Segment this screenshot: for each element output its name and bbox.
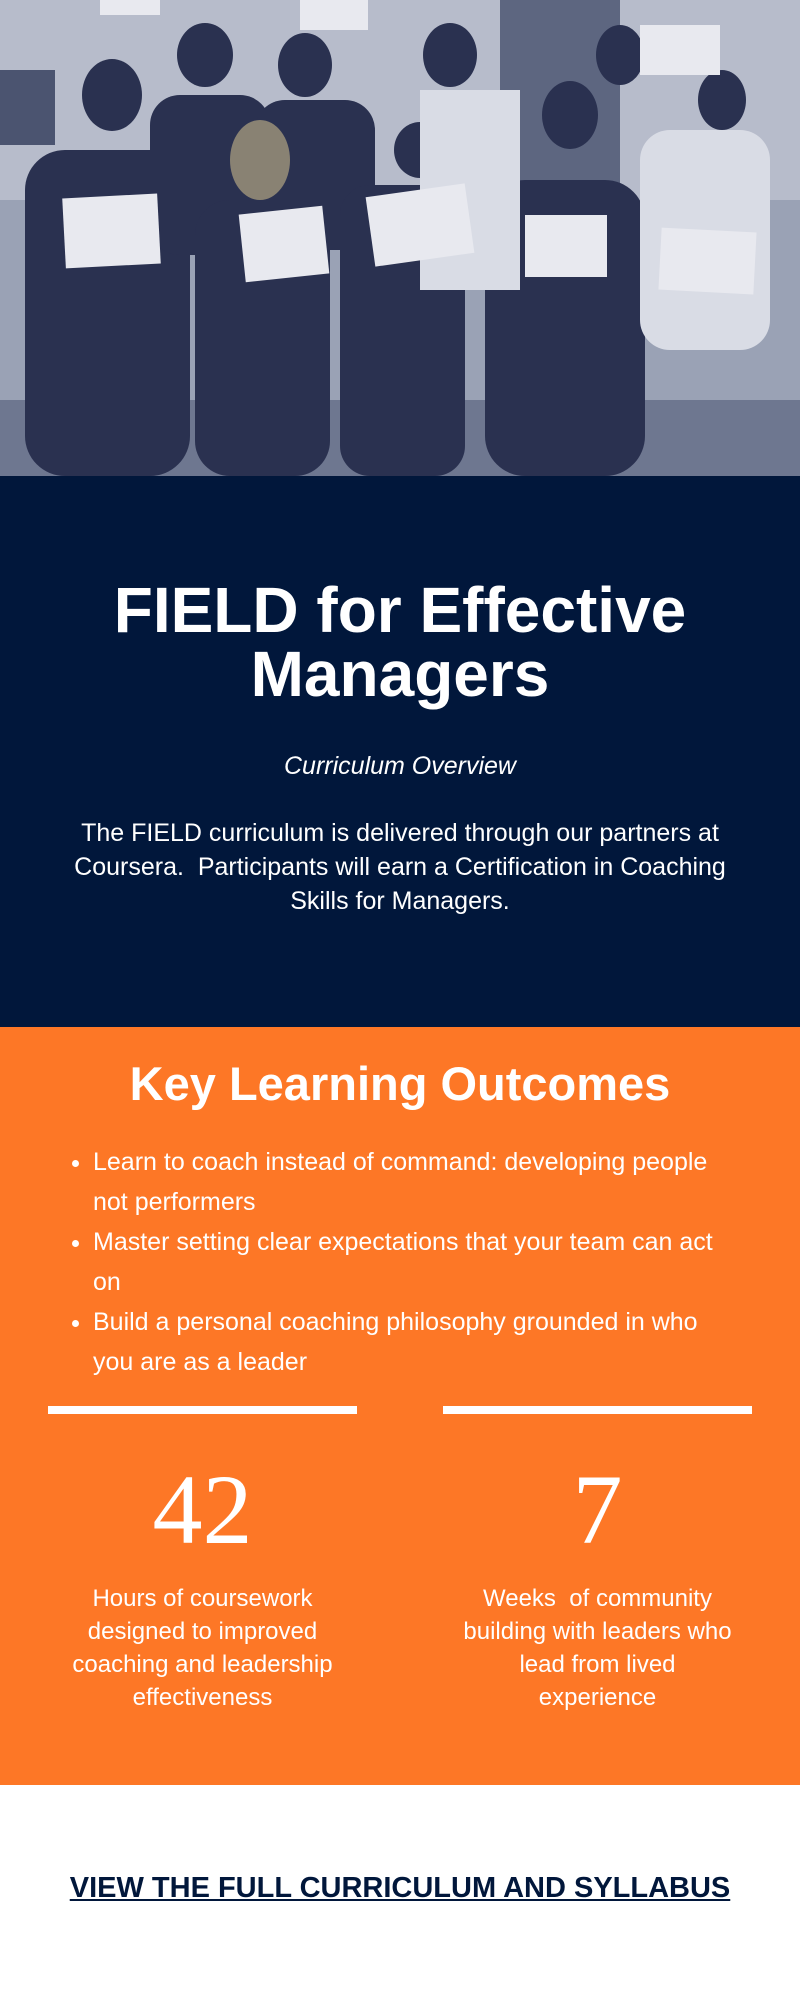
- panel: intro: [0, 476, 800, 1027]
- heading: Key Learning Outcomes: [130, 1057, 670, 1110]
- bullet list: not performers: [93, 1188, 256, 1216]
- stat: 42 hours: [48, 1406, 357, 1711]
- stat: 42 hours: coaching and leadership: [72, 1651, 333, 1678]
- panel: key learning outcomes: [0, 1027, 800, 1785]
- bullet list: Build a personal coaching philosophy grounded in who: [93, 1308, 698, 1336]
- description: The FIELD curriculum is delivered through our partners at Coursera. Participants will earn a Certification in Coaching Skills for Managers.: [74, 819, 726, 915]
- stat: 42 hours: Hours of coursework: [92, 1585, 313, 1612]
- stat: 42 hours: effectiveness: [133, 1684, 272, 1711]
- photo: group with certificates: [0, 0, 800, 476]
- stat: 7 weeks: experience: [539, 1684, 656, 1711]
- subtitle: Curriculum Overview: [284, 752, 516, 780]
- stat: 7 weeks: 7: [572, 1454, 622, 1565]
- stat: 42 hours: 42: [152, 1454, 252, 1565]
- stat: 7 weeks: Weeks of community: [483, 1585, 712, 1612]
- link: curriculum: VIEW THE FULL CURRICULUM AND SYLLABUS: [70, 1872, 730, 1904]
- stat: 7 weeks: building with leaders who: [463, 1618, 732, 1645]
- title: FIELD for Effective Managers: [114, 574, 686, 710]
- bullet list: Learn to coach instead of command: developing people: [93, 1148, 707, 1176]
- bullet list: Master setting clear expectations that your team can act: [93, 1228, 713, 1256]
- stat: 7 weeks: [443, 1406, 752, 1711]
- bullet list: [72, 1148, 713, 1376]
- bullet list: on: [93, 1268, 121, 1296]
- stat: 42 hours: designed to improved: [88, 1618, 317, 1645]
- stat: 7 weeks: lead from lived: [519, 1651, 676, 1678]
- bullet list: you are as a leader: [93, 1348, 307, 1376]
